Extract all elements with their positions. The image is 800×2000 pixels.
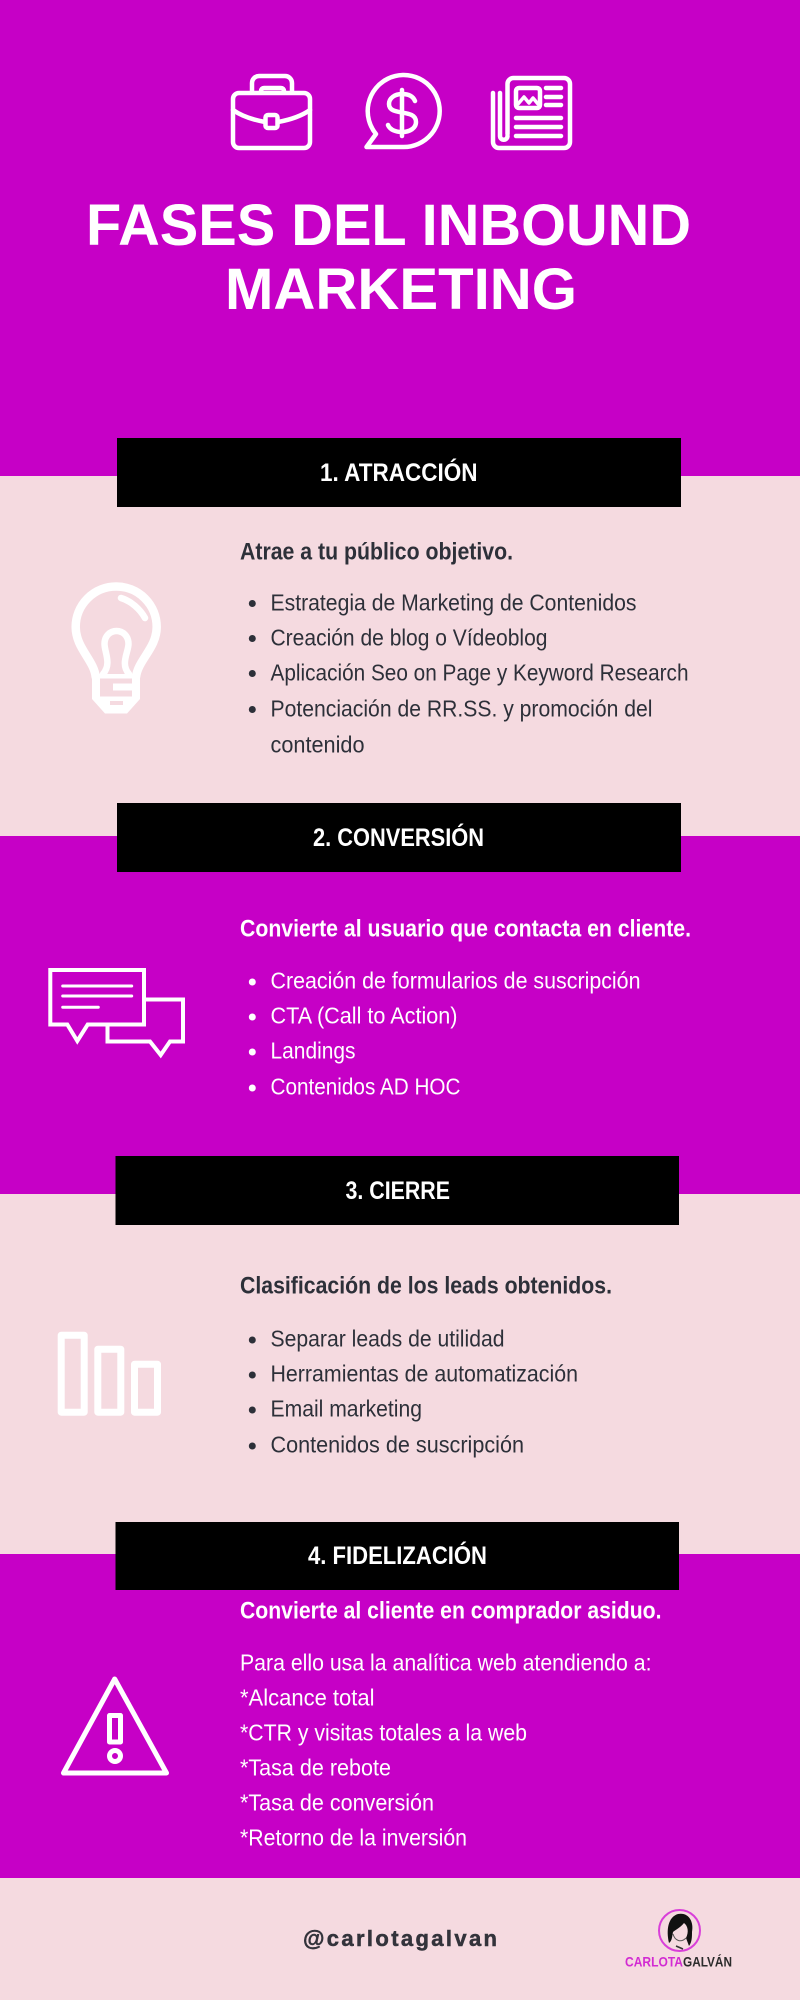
section 1 heading bar (117, 438, 681, 507)
logo: Carlota Galván (625, 1910, 732, 1970)
panel: fidelización background (0, 1554, 800, 1878)
section 4 text: *Tasa de conversión (240, 1790, 434, 1816)
section 4 text: *Retorno de la inversión (240, 1825, 467, 1851)
section 1 heading bar: 1. ATRACCIÓN (320, 457, 478, 487)
title: FASES DEL INBOUND (86, 193, 691, 258)
section 2 text: Contenidos AD HOC (270, 1074, 461, 1100)
footer handle: @carlotagalvan (303, 1926, 497, 1951)
section 1 text: Estrategia de Marketing de Contenidos (270, 590, 636, 616)
panel: atracción background (0, 476, 800, 836)
section 4 text: Para ello usa la analítica web atendiendo a: (240, 1650, 652, 1676)
section 2 text: Creación de formularios de suscripción (270, 968, 640, 994)
section 1 text: Atrae a tu público objetivo. (240, 538, 513, 566)
icon: newspaper (493, 78, 570, 148)
panel: footer background (0, 1878, 800, 2000)
section 4 text: Convierte al cliente en comprador asiduo. (240, 1598, 662, 1624)
section 3 text: Contenidos de suscripción (270, 1432, 524, 1458)
section 1 text: Potenciación de RR.SS. y promoción del (270, 696, 652, 722)
section 4 text: *Alcance total (240, 1685, 374, 1711)
section 4 text: *CTR y visitas totales a la web (240, 1720, 527, 1746)
section 4 heading bar: 4. FIDELIZACIÓN (308, 1540, 487, 1570)
icon: warning triangle (64, 1679, 166, 1773)
panel: header background (0, 0, 800, 476)
panel: conversión background (0, 836, 800, 1194)
section 3 heading bar (116, 1156, 679, 1225)
section 3 text (240, 1272, 612, 1458)
icon: briefcase (233, 76, 310, 148)
section 3 heading bar: 3. CIERRE (346, 1177, 450, 1205)
section 2 heading bar (117, 803, 681, 872)
icon: chat bubbles (50, 970, 183, 1055)
section 2 text (240, 916, 691, 1100)
section 2 text: Convierte al usuario que contacta en cliente. (240, 916, 691, 942)
section 1 text: Aplicación Seo on Page y Keyword Research (270, 660, 688, 686)
logo: Carlota Galván: CARLOTA (625, 1954, 683, 1970)
section 1 text: Creación de blog o Vídeoblog (270, 625, 548, 651)
section 1 text (240, 538, 688, 758)
section 3 text: Herramientas de automatización (270, 1361, 578, 1387)
panel: cierre background (0, 1194, 800, 1554)
icon: dollar speech bubble (366, 75, 440, 147)
section 3 text: Email marketing (270, 1396, 422, 1422)
icon: bar chart (61, 1335, 158, 1412)
section 2 heading bar: 2. CONVERSIÓN (313, 822, 484, 852)
title (86, 193, 691, 322)
section 4 text: *Tasa de rebote (240, 1755, 391, 1781)
icon: light bulb (76, 586, 157, 714)
section 1 text: contenido (270, 732, 364, 758)
section 3 text: Separar leads de utilidad (270, 1326, 504, 1352)
section 3 text: Clasificación de los leads obtenidos. (240, 1272, 612, 1300)
section 4 text (240, 1598, 662, 1851)
title: MARKETING (225, 257, 577, 322)
section 2 text: CTA (Call to Action) (270, 1003, 458, 1029)
section 4 heading bar (116, 1522, 679, 1590)
logo: Carlota Galván: GALVÁN (683, 1954, 732, 1970)
section 2 text: Landings (270, 1038, 356, 1064)
